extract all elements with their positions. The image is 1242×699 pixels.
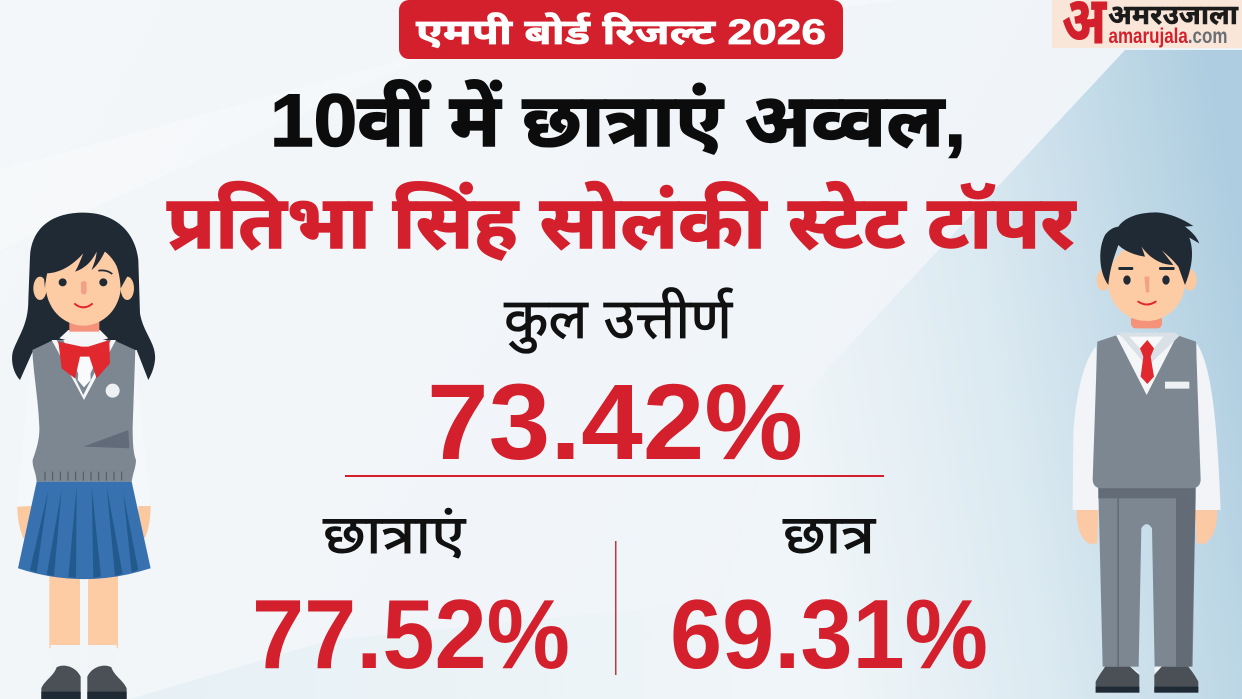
label: total passed: कुल उत्तीर्ण	[504, 287, 734, 354]
divider	[345, 475, 884, 477]
logo: Amar Ujala: अमरउजाला	[1108, 0, 1239, 30]
header badge	[399, 0, 843, 59]
header badge: एमपी बोर्ड रिजल्ट 2026	[416, 12, 826, 52]
illustration: girl student	[12, 213, 155, 699]
logo: Amar Ujala: amarujala.com	[1108, 25, 1228, 48]
vertical divider	[615, 541, 616, 675]
girls percent: 77.52%	[252, 579, 570, 689]
title line 2: प्रतिभा सिंह सोलंकी स्टेट टॉपर	[167, 181, 1076, 264]
total percent: 73.42%	[427, 361, 803, 482]
title line 1: 10वीं में छात्राएं अव्वल,	[270, 79, 966, 162]
logo: Amar Ujala	[1052, 0, 1242, 57]
illustration: boy student	[1073, 212, 1221, 693]
boys percent: 69.31%	[670, 579, 988, 689]
label: girls: छात्राएं	[323, 505, 466, 565]
label: boys: छात्र	[783, 505, 876, 565]
